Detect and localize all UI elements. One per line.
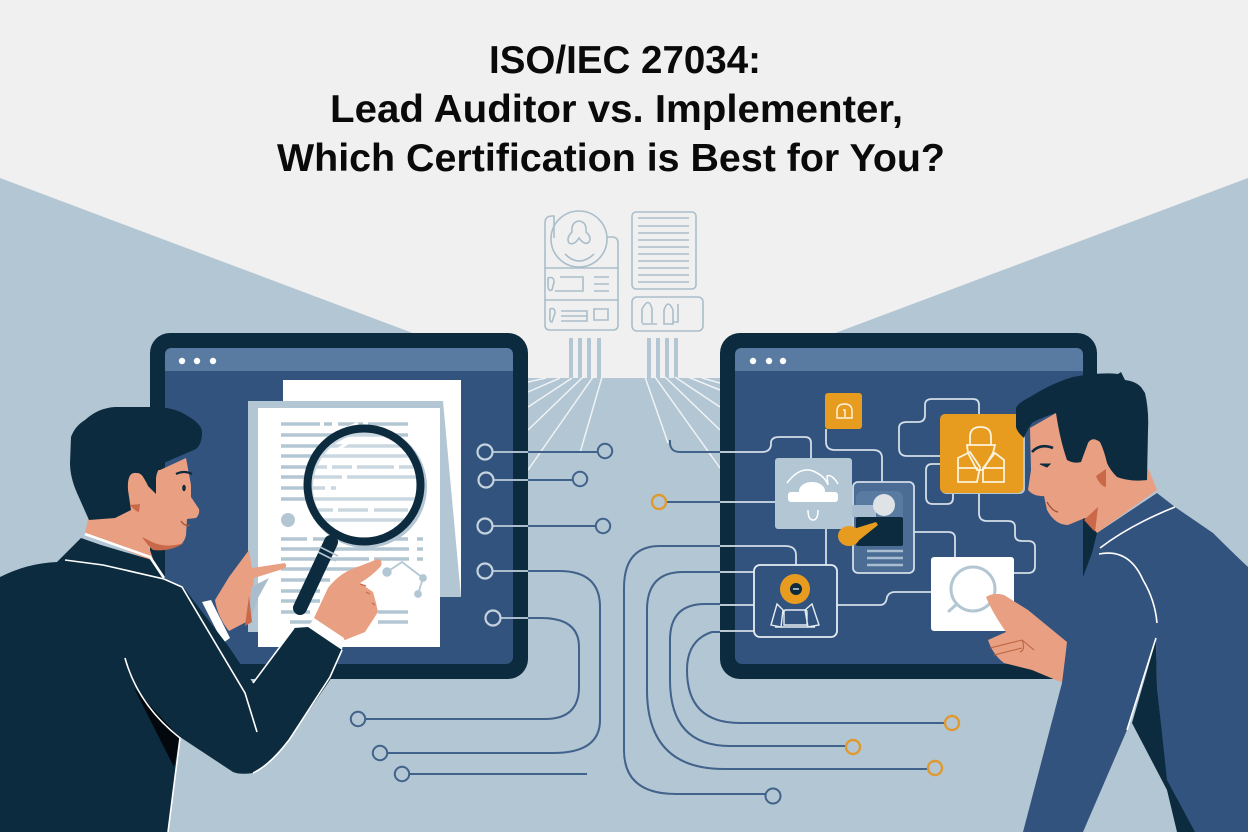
- left hand: [215, 550, 286, 631]
- shirt: [1023, 493, 1248, 832]
- card: cloud: [775, 458, 852, 529]
- suit highlights: [65, 560, 342, 832]
- title: Lead Auditor vs. Implementer,: [330, 88, 903, 131]
- neck and face: [85, 458, 199, 562]
- right pointing hand: [314, 559, 382, 640]
- title: ISO/IEC 27034:: [489, 39, 761, 82]
- radiating white rays: [528, 377, 720, 470]
- ear: [1087, 441, 1107, 487]
- panel: left monitor: [150, 333, 528, 679]
- small network graph: [383, 562, 426, 597]
- ear: [130, 473, 146, 512]
- document stack: [248, 380, 461, 647]
- neck and face: [1028, 413, 1157, 533]
- dark collar shadow: [1083, 522, 1097, 577]
- icon: magnifying glass: [300, 423, 423, 608]
- card: person with laptop: [754, 565, 837, 637]
- panel: right monitor: [720, 333, 1097, 679]
- title: Which Certification is Best for You?: [277, 137, 945, 180]
- dark torso shadow: [1132, 640, 1195, 832]
- document text lines: [281, 424, 423, 622]
- suit: [0, 538, 342, 832]
- screen circuit lines: [720, 399, 1035, 631]
- person: implementer: [986, 372, 1248, 832]
- hair: [1016, 372, 1148, 481]
- icon: large orange lock: [940, 414, 1025, 494]
- title: [277, 39, 945, 180]
- connector pillars: [569, 338, 678, 378]
- icon: faint document: [632, 212, 703, 331]
- pointing hand: [986, 594, 1067, 683]
- card: white search: [931, 557, 1014, 631]
- right outer connector lines: [624, 440, 959, 804]
- right cuff: [308, 618, 344, 650]
- card: profile with orange hand: [852, 482, 914, 573]
- icon: small orange lock: [825, 393, 862, 429]
- left cuff: [202, 600, 230, 643]
- facial features: [176, 472, 192, 526]
- icon: orange hand: [838, 522, 878, 546]
- person: lead auditor: [0, 407, 382, 832]
- hair: [70, 407, 202, 520]
- shirt collar: [85, 534, 164, 578]
- facial features: [1032, 446, 1058, 512]
- shirt highlights: [1099, 507, 1175, 730]
- icon: faint profile card: [545, 211, 618, 330]
- left connector lines: [351, 444, 612, 781]
